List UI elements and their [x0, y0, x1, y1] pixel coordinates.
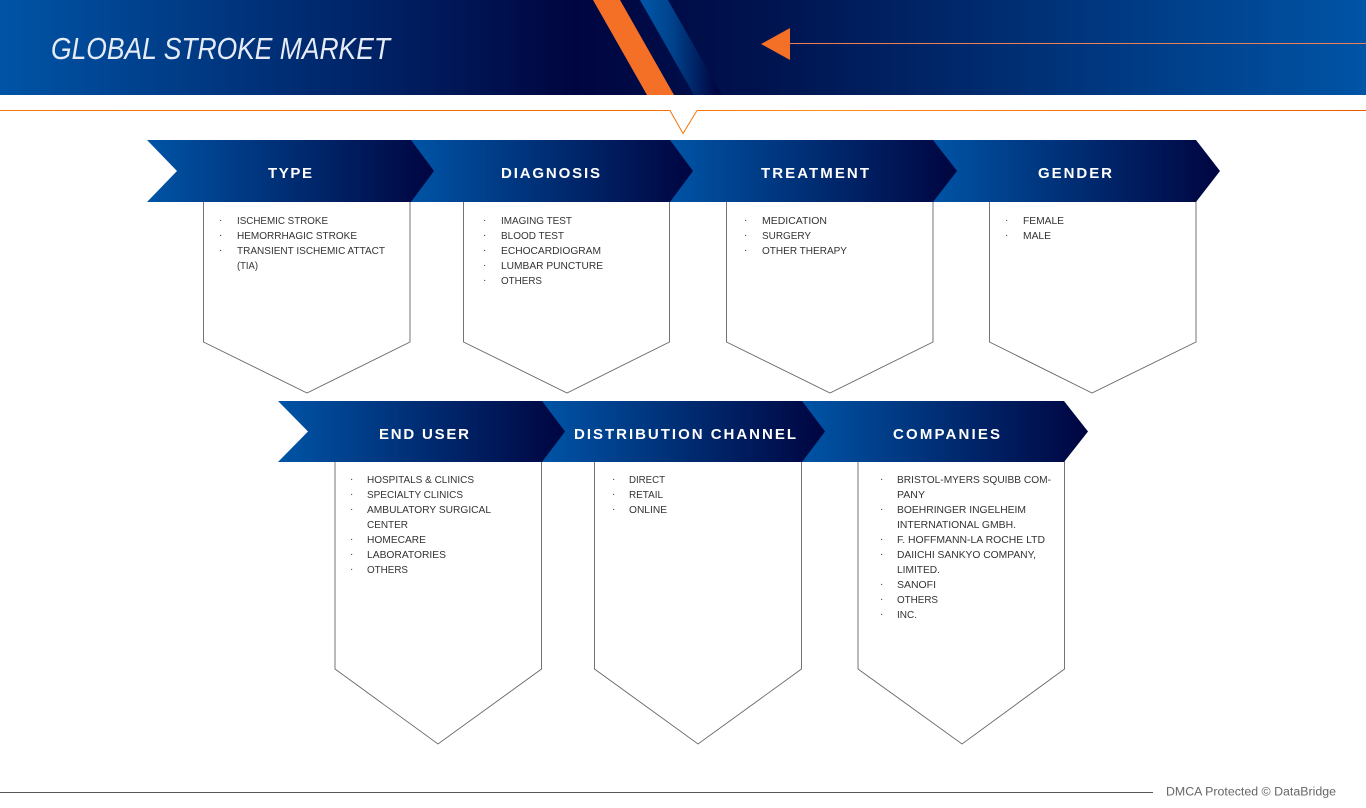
gender list: ·	[1005, 215, 1008, 226]
footer credit: DMCA Protected © DataBridge	[1166, 786, 1336, 798]
companies list: BOEHRINGER INGELHEIM	[897, 505, 1026, 516]
header banner	[0, 0, 1366, 95]
distribution channel box	[594, 460, 802, 744]
end user list: OTHERS	[367, 565, 408, 576]
chevron: end user	[278, 401, 565, 462]
chevron: type	[147, 140, 434, 202]
companies box	[858, 460, 1064, 744]
chevron: gender	[933, 140, 1220, 202]
end user list: ·	[350, 564, 353, 575]
arrow line	[789, 43, 1366, 44]
type box	[204, 200, 410, 393]
panel: end user	[335, 460, 542, 744]
end user box	[335, 460, 542, 744]
companies list: ·	[880, 579, 883, 590]
companies list: SANOFI	[897, 580, 936, 591]
companies list: DAIICHI SANKYO COMPANY,	[897, 550, 1036, 561]
type list: ·	[219, 230, 222, 241]
companies list: ·	[880, 549, 883, 560]
diagnosis list	[483, 215, 603, 287]
type list: ISCHEMIC STROKE	[237, 216, 328, 227]
diagnosis box	[464, 200, 670, 393]
diagnosis list: BLOOD TEST	[501, 231, 565, 242]
diagnosis list: IMAGING TEST	[501, 216, 573, 227]
panel: distribution channel	[594, 460, 802, 744]
distribution channel list: ONLINE	[629, 505, 667, 516]
end user list: SPECIALTY CLINICS	[367, 490, 463, 501]
end user list: ·	[350, 504, 353, 515]
treatment list: SURGERY	[762, 231, 811, 242]
chevron: treatment: TREATMENT	[761, 165, 869, 182]
chevron: treatment	[670, 140, 957, 202]
type list: TRANSIENT ISCHEMIC ATTACT	[237, 246, 386, 257]
companies list: PANY	[897, 490, 925, 501]
panel: type	[204, 200, 410, 393]
distribution channel list	[612, 474, 667, 516]
chevron: gender: GENDER	[1038, 165, 1112, 182]
blue diagonal slash	[640, 0, 722, 95]
end user list: ·	[350, 549, 353, 560]
chevron: diagnosis: DIAGNOSIS	[501, 165, 600, 182]
gender list	[1005, 215, 1064, 242]
diagnosis list: ·	[483, 230, 486, 241]
distribution channel list: DIRECT	[629, 475, 666, 486]
treatment list	[744, 215, 847, 257]
type list: HEMORRHAGIC STROKE	[237, 231, 357, 242]
treatment list: MEDICATION	[762, 216, 827, 227]
end user list: HOSPITALS & CLINICS	[367, 475, 474, 486]
gender list: FEMALE	[1023, 216, 1064, 227]
diagnosis list: ·	[483, 245, 486, 256]
gender list: MALE	[1023, 231, 1051, 242]
orange diagonal slash	[593, 0, 674, 95]
chevron: companies	[802, 401, 1088, 462]
treatment list: OTHER THERAPY	[762, 246, 847, 257]
companies list: LIMITED.	[897, 565, 940, 576]
treatment list: ·	[744, 215, 747, 226]
panel: companies	[858, 460, 1064, 744]
distribution channel list: ·	[612, 489, 615, 500]
panel: treatment	[726, 200, 933, 393]
companies list	[880, 474, 1051, 621]
end user list: HOMECARE	[367, 535, 426, 546]
treatment box	[726, 200, 933, 393]
treatment list: ·	[744, 245, 747, 256]
end user list	[350, 474, 491, 576]
distribution channel list: RETAIL	[629, 490, 663, 501]
distribution channel list: ·	[612, 504, 615, 515]
end user list: ·	[350, 489, 353, 500]
type list	[219, 215, 386, 272]
end user list: ·	[350, 474, 353, 485]
diagnosis list: ·	[483, 215, 486, 226]
chevron: distribution channel	[542, 401, 825, 462]
chevron: companies: COMPANIES	[893, 426, 1000, 443]
gender list: ·	[1005, 230, 1008, 241]
end user list: LABORATORIES	[367, 550, 446, 561]
end user list: AMBULATORY SURGICAL	[367, 505, 491, 516]
companies list: INC.	[897, 610, 917, 621]
arrow head	[761, 28, 790, 60]
diagnosis list: ·	[483, 275, 486, 286]
diagnosis list: OTHERS	[501, 276, 542, 287]
end user list: ·	[350, 534, 353, 545]
type list: (TIA)	[237, 261, 258, 272]
type list: ·	[219, 245, 222, 256]
heading chevrons row 2	[278, 401, 1088, 462]
heading chevrons row 1	[147, 140, 1220, 202]
treatment list: ·	[744, 230, 747, 241]
end user list: CENTER	[367, 520, 408, 531]
companies list: OTHERS	[897, 595, 938, 606]
chevron: end user: END USER	[379, 426, 469, 443]
title: GLOBAL STROKE MARKET	[51, 31, 392, 66]
companies list: ·	[880, 594, 883, 605]
type list: ·	[219, 215, 222, 226]
diagnosis list: ·	[483, 260, 486, 271]
companies list: ·	[880, 534, 883, 545]
distribution channel list: ·	[612, 474, 615, 485]
panel: diagnosis	[464, 200, 670, 393]
companies list: ·	[880, 504, 883, 515]
companies list: ·	[880, 609, 883, 620]
companies list: ·	[880, 474, 883, 485]
companies list: F. HOFFMANN-LA ROCHE LTD	[897, 535, 1045, 546]
chevron: distribution channel: DISTRIBUTION CHANNEL	[574, 426, 796, 443]
diagnosis list: LUMBAR PUNCTURE	[501, 261, 603, 272]
chevron: type: TYPE	[268, 165, 312, 182]
gender box	[990, 200, 1196, 393]
orange divider with notch	[0, 110, 1366, 134]
companies list: BRISTOL-MYERS SQUIBB COM-	[897, 475, 1051, 486]
chevron: diagnosis	[411, 140, 693, 202]
companies list: INTERNATIONAL GMBH.	[897, 520, 1016, 531]
diagnosis list: ECHOCARDIOGRAM	[501, 246, 601, 257]
panel: gender	[990, 200, 1196, 393]
